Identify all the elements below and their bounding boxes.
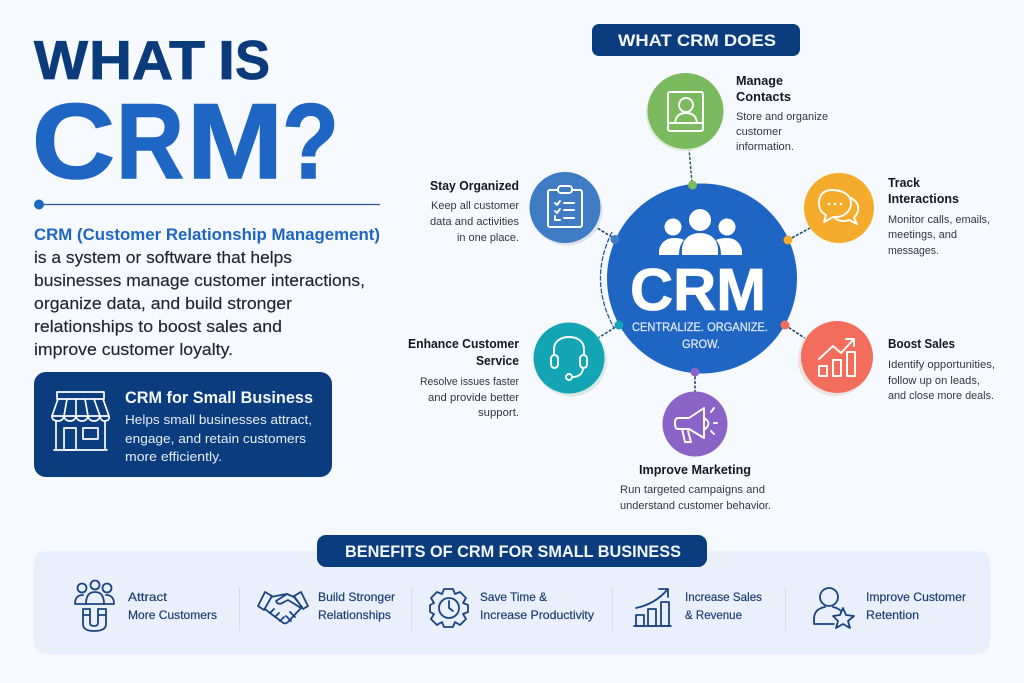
title rule — [34, 200, 380, 210]
definition text — [34, 225, 380, 359]
node: manage contacts: Contacts — [736, 90, 791, 104]
panel: benefits — [34, 535, 990, 654]
title — [32, 29, 339, 201]
center hub: CRM: CENTRALIZE. ORGANIZE. — [632, 322, 768, 334]
connectors — [594, 148, 810, 392]
node: manage contacts: Store and organize — [736, 111, 828, 123]
node: improve marketing: Improve Marketing — [639, 463, 751, 477]
node: boost sales: follow up on leads, — [888, 375, 980, 387]
title: ? — [282, 81, 339, 201]
node: improve marketing: understand customer behavior. — [620, 500, 771, 512]
node: track interactions: Track — [888, 176, 920, 190]
title: H — [89, 29, 132, 91]
benefit: increase sales and revenue: Increase Sales — [685, 590, 762, 604]
node: manage contacts: information. — [736, 141, 794, 153]
definition text: relationships to boost sales and — [34, 317, 282, 336]
node: track interactions: meetings, and — [888, 229, 957, 241]
node: stay organized: in one place. — [457, 232, 519, 244]
node: track interactions: messages. — [888, 245, 939, 257]
panel: CRM for small business: CRM for Small Business — [125, 389, 313, 407]
definition text: is a system or software that helps — [34, 248, 292, 267]
node: stay organized: data and activities — [430, 216, 519, 228]
heading: benefits — [317, 535, 707, 567]
benefit: improve customer retention: Retention — [866, 608, 919, 622]
benefit: save time and increase productivity: Increase Productivity — [480, 608, 594, 622]
benefit: improve customer retention — [814, 588, 966, 628]
node: manage contacts — [646, 73, 828, 153]
node: enhance customer service — [408, 322, 607, 419]
node: enhance customer service: and provide better — [428, 392, 519, 404]
node: boost sales: Boost Sales — [888, 337, 955, 351]
title: A — [132, 29, 173, 91]
node: stay organized: Stay Organized — [430, 179, 519, 193]
node: enhance customer service: Service — [476, 354, 519, 368]
panel: CRM for small business: engage, and retain customers — [125, 431, 307, 446]
benefit: attract more customers: Attract — [128, 590, 168, 604]
benefit: build stronger relationships — [258, 590, 395, 624]
node: track interactions: Interactions — [888, 192, 959, 206]
benefit: save time and increase productivity — [430, 589, 594, 627]
definition text: organize data, and build stronger — [34, 294, 292, 313]
benefit: save time and increase productivity: Save Time & — [480, 590, 547, 604]
title: M — [187, 81, 283, 201]
panel: CRM for small business: Helps small businesses attract, — [125, 412, 312, 427]
center hub: CRM — [607, 184, 797, 374]
benefit: improve customer retention: Improve Customer — [866, 590, 966, 604]
panel: CRM for small business — [34, 372, 332, 477]
title: T — [169, 29, 205, 91]
node: stay organized: Keep all customer — [431, 200, 519, 212]
connector dots — [610, 180, 792, 376]
node: enhance customer service: Resolve issues faster — [420, 376, 519, 388]
icon: storefront — [52, 392, 109, 450]
heading: what CRM does: WHAT CRM DOES — [618, 31, 776, 50]
center hub: CRM: CRM — [630, 257, 766, 323]
title: C — [32, 81, 115, 201]
node: boost sales: Identify opportunities, — [888, 359, 995, 371]
title: R — [116, 81, 184, 201]
title: S — [235, 29, 270, 91]
heading: benefits: BENEFITS OF CRM FOR SMALL BUSINESS — [345, 543, 681, 561]
title: I — [218, 29, 235, 91]
title: W — [34, 29, 88, 91]
benefit: attract more customers — [75, 580, 217, 631]
benefit: attract more customers: More Customers — [128, 608, 217, 622]
definition text: CRM (Customer Relationship Management) — [34, 225, 380, 244]
benefit: increase sales and revenue: & Revenue — [685, 608, 742, 622]
node: enhance customer service: Enhance Customer — [408, 337, 519, 351]
node: improve marketing — [620, 392, 771, 512]
benefit: build stronger relationships: Build Stronger — [318, 590, 395, 604]
panel: CRM for small business: more efficiently. — [125, 449, 222, 464]
definition text: improve customer loyalty. — [34, 340, 233, 359]
benefit: increase sales and revenue — [634, 589, 762, 626]
node: manage contacts: Manage — [736, 74, 783, 88]
node: boost sales — [798, 321, 995, 402]
node: track interactions — [804, 173, 990, 257]
node: manage contacts: customer — [736, 126, 782, 138]
node: track interactions: Monitor calls, emails, — [888, 214, 990, 226]
node: improve marketing: Run targeted campaigns and — [620, 484, 765, 496]
definition text: businesses manage customer interactions, — [34, 271, 365, 290]
node: enhance customer service: support. — [478, 407, 519, 419]
node: stay organized — [430, 172, 602, 246]
center hub: CRM: GROW. — [682, 339, 720, 351]
benefit: build stronger relationships: Relationships — [318, 608, 391, 622]
heading: what CRM does — [592, 24, 800, 56]
node: boost sales: and close more deals. — [888, 390, 994, 402]
icon: people — [659, 209, 742, 255]
